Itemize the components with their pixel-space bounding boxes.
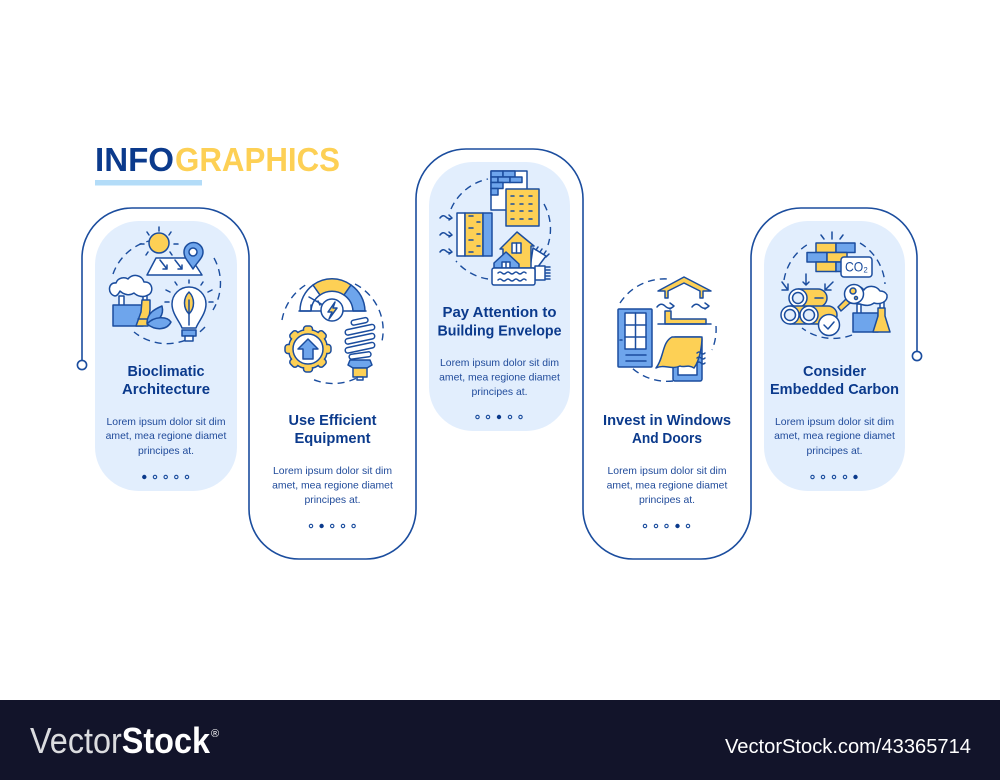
panel: use efficient equipment xyxy=(272,279,393,528)
footer logo: VectorStock xyxy=(30,720,211,761)
body text: amet, mea regione diamet xyxy=(272,480,393,492)
icon: wall layers and house xyxy=(440,171,550,285)
body text: amet, mea regione diamet xyxy=(774,431,895,442)
body text: Lorem ipsum dolor sit dim xyxy=(775,417,894,428)
heading: Use Efficient xyxy=(288,412,377,429)
body text: amet, mea regione diamet xyxy=(439,372,560,384)
heading: Invest in Windows xyxy=(603,412,731,429)
body text: principes at. xyxy=(639,495,695,506)
connecting outline xyxy=(77,149,922,559)
pagination dots xyxy=(309,524,355,528)
body text: principes at. xyxy=(138,446,194,457)
icon: sun, factory, light bulb xyxy=(109,227,220,344)
body text xyxy=(439,358,560,398)
co2 label: CO₂ xyxy=(845,258,868,274)
body text: principes at. xyxy=(471,387,528,398)
body text xyxy=(106,417,226,457)
heading: Consider xyxy=(803,363,866,380)
footer bar xyxy=(0,700,1000,780)
pagination dots xyxy=(143,475,189,479)
heading line 2: And Doors xyxy=(632,430,702,447)
heading line 2: Equipment xyxy=(294,430,371,447)
panel: windows and doors xyxy=(603,277,731,528)
body text: principes at. xyxy=(806,446,863,457)
body text xyxy=(272,466,393,506)
panel backgrounds xyxy=(95,162,905,491)
icon: door, house section, curtain xyxy=(618,277,716,381)
body text xyxy=(774,417,895,457)
pagination dots xyxy=(811,475,857,479)
body text: amet, mea regione diamet xyxy=(106,431,226,442)
heading line 2: Building Envelope xyxy=(438,322,562,340)
body text: Lorem ipsum dolor sit dim xyxy=(608,466,726,477)
pagination dots xyxy=(643,524,690,528)
body text: Lorem ipsum dolor sit dim xyxy=(273,466,392,477)
title: INFO xyxy=(95,141,174,178)
pagination dots xyxy=(476,415,522,419)
body text: principes at. xyxy=(304,495,361,506)
heading line 2: Embedded Carbon xyxy=(770,381,899,398)
icon: gauge, gear, bulb xyxy=(282,279,383,384)
body text: amet, mea regione diamet xyxy=(607,480,727,492)
panel: embedded carbon xyxy=(770,232,899,479)
footer url: VectorStock.com/43365714 xyxy=(725,736,971,758)
title xyxy=(95,141,340,186)
heading: Pay Attention to xyxy=(442,304,556,321)
icon: bricks, logs, factory xyxy=(781,232,890,338)
registered mark: ® xyxy=(211,728,219,740)
panel: building envelope xyxy=(438,171,562,419)
body text xyxy=(607,466,727,506)
heading line 2: Architecture xyxy=(122,381,210,398)
heading: Bioclimatic xyxy=(128,363,204,380)
title: GRAPHICS xyxy=(175,141,340,178)
body text: Lorem ipsum dolor sit dim xyxy=(107,417,225,428)
panel: bioclimatic architecture xyxy=(106,227,226,479)
body text: Lorem ipsum dolor sit dim xyxy=(440,358,559,369)
